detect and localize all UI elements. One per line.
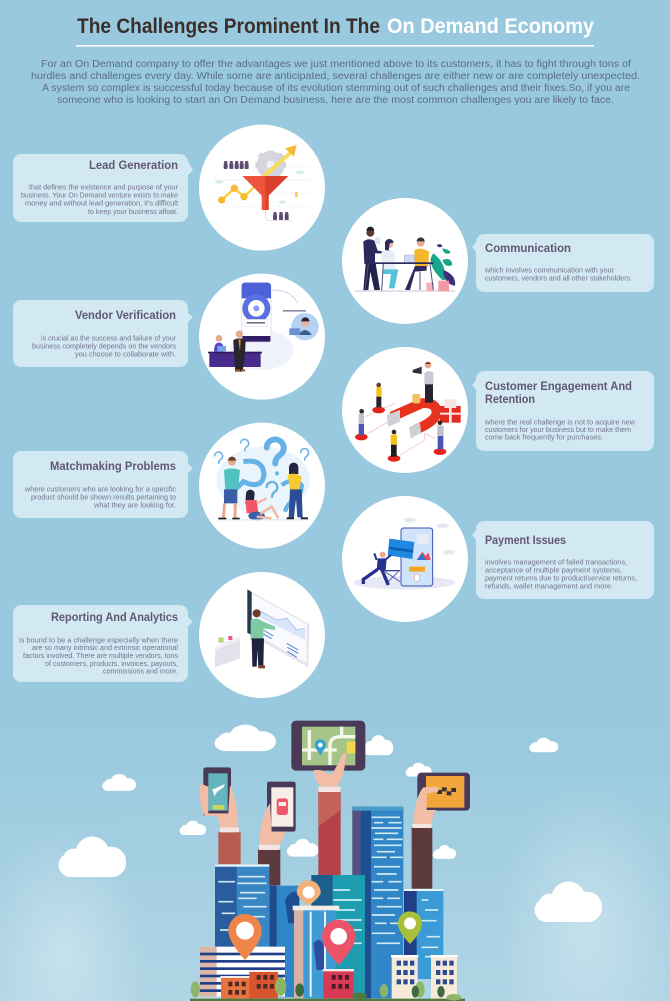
panel: lead generation <box>13 154 193 222</box>
icon: matchmaking questions <box>199 423 325 549</box>
panel: reporting and analytics: of customers, products, invoices, payouts, <box>45 661 178 668</box>
panel: lead generation: Lead Generation <box>89 160 178 172</box>
panel: payment issues: involves management of failed transactions, <box>485 560 627 566</box>
arm: center with map tablet <box>291 721 365 876</box>
panel: customer engagement and retention: where the real challenge is not to acquire new <box>484 420 636 426</box>
icon: analytics dashboard <box>199 572 325 698</box>
title: The Challenges Prominent In The <box>77 15 380 38</box>
panel: lead generation: money and without lead generation, it's difficult <box>25 200 178 208</box>
icon: lead funnel <box>199 125 325 251</box>
panel: vendor verification: you choose to collaborate with. <box>75 352 176 358</box>
trees and ground <box>190 977 465 1001</box>
panel: reporting and analytics <box>13 605 193 682</box>
map pins <box>228 880 422 965</box>
panel: lead generation: that defines the existence and purpose of your <box>29 184 179 192</box>
icon: customer magnet <box>342 347 468 473</box>
arm: right with taxi app <box>412 773 470 889</box>
panel: customer engagement and retention: Customer Engagement And <box>485 381 632 393</box>
skyline buildings <box>200 807 458 999</box>
panel: matchmaking problems: what they are looking for. <box>93 502 176 510</box>
panel: vendor verification: Vendor Verification <box>75 310 176 322</box>
panel: vendor verification: is crucial as the success and failure of your <box>41 336 177 342</box>
panel: reporting and analytics: factors involved. There are multiple vendors, tons <box>23 653 179 660</box>
panel: vendor verification <box>13 300 193 367</box>
panel: payment issues: Payment Issues <box>485 535 566 547</box>
background clouds <box>59 738 602 922</box>
panel: payment issues: payment returns due to product/service returns, <box>485 576 637 582</box>
panel: communication: which involves communication with your <box>484 268 615 274</box>
panel: reporting and analytics: commissions and more. <box>103 668 178 676</box>
panel: vendor verification: business completely depends on the vendors <box>32 344 177 350</box>
panel: communication: customers, vendors and all other stakeholders. <box>485 276 632 282</box>
panel: communication: Communication <box>485 243 571 255</box>
panel: customer engagement and retention: customers for your business but to make them <box>485 427 631 434</box>
panel: matchmaking problems: Matchmaking Problems <box>50 461 176 473</box>
panel: reporting and analytics: are so many intrinsic and extrinsic operational <box>32 645 178 652</box>
city illustration <box>180 721 470 1001</box>
intro paragraph: hurdles and challenges every day. While some are anticipated, several challenges are either new or are completely unexpected. <box>31 71 640 82</box>
intro paragraph: A system so complex is successful today because of its evolution stemming out of such challenges and their fixes.So, if you are <box>42 83 630 94</box>
panel: communication <box>472 234 654 292</box>
icon: mobile payment <box>342 496 468 622</box>
title <box>77 15 594 38</box>
panel: matchmaking problems <box>13 451 193 518</box>
panel: payment issues: acceptance of multiple payment systems, <box>485 568 622 574</box>
icon: vendor verification app <box>199 274 325 400</box>
intro paragraph: someone who is looking to start an On Demand business, here are the most common challenges you are likely to face. <box>57 95 614 106</box>
arm: left with flight app <box>200 767 241 864</box>
arm: second with transit app <box>258 782 296 885</box>
panel: customer engagement and retention: come back frequently for purchases. <box>485 434 603 442</box>
panel: payment issues <box>472 521 654 599</box>
intro paragraph: For an On Demand company to offer the advantages we just mentioned above to its customers, it has to fight through tons of <box>41 59 631 70</box>
panel: matchmaking problems: product should be shown results pertaining to <box>31 494 176 502</box>
panel: reporting and analytics: Reporting And Analytics <box>51 612 178 624</box>
panel: customer engagement and retention <box>472 371 654 451</box>
panel: matchmaking problems: where customers who are looking for a specific <box>24 486 177 494</box>
panel: lead generation: business. Your On Demand venture exists to make <box>21 192 178 200</box>
city clouds <box>180 725 456 859</box>
intro paragraph <box>31 59 640 106</box>
title: On Demand Economy <box>387 15 594 38</box>
icon: team communication <box>342 198 468 324</box>
panel: lead generation: to keep your business afloat. <box>88 209 178 216</box>
panel: payment issues: refunds, wallet management and more. <box>485 584 613 590</box>
panel: reporting and analytics: is bound to be a challenge especially when there <box>19 638 178 644</box>
panel: customer engagement and retention: Retention <box>485 394 535 406</box>
